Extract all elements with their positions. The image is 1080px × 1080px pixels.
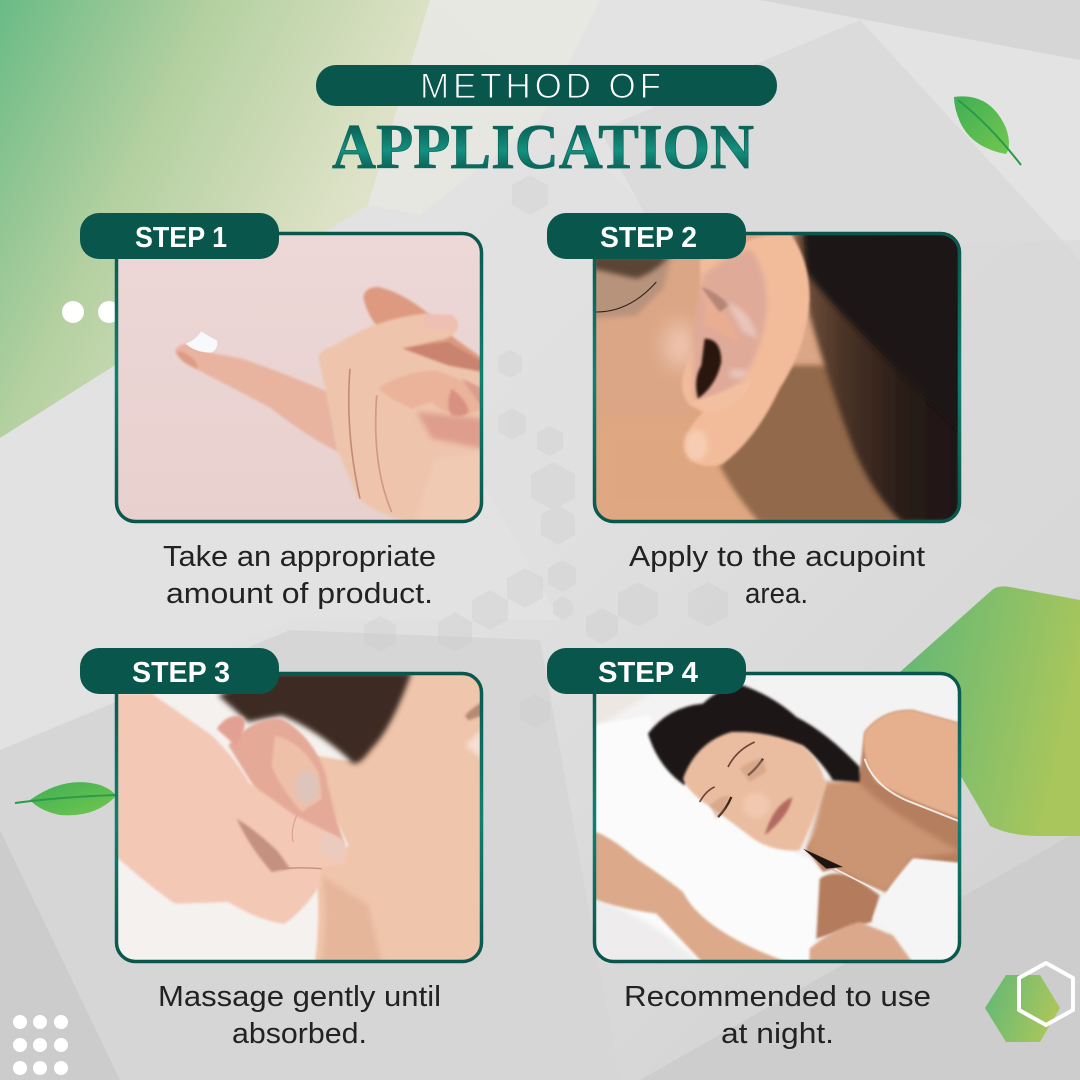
photo: finger with cream — [115, 232, 483, 523]
caption: step 4: Recommended to use — [624, 981, 931, 1013]
badge: step 2: STEP 2 — [600, 222, 697, 254]
badge: step 4: STEP 4 — [598, 657, 698, 689]
badge: step 2 — [547, 213, 746, 259]
badge: step 3: STEP 3 — [132, 657, 230, 689]
panel: step 2 — [547, 213, 961, 610]
panel: step 3 — [80, 648, 483, 1050]
green hexagon right — [900, 586, 1080, 836]
photo: sleeping woman — [593, 672, 961, 963]
badge: step 1: STEP 1 — [135, 222, 227, 254]
photo frame — [116, 674, 482, 962]
title: application: APPLICATION — [332, 112, 754, 182]
caption: step 2: area. — [745, 578, 808, 610]
badge: step 1 — [80, 213, 279, 259]
caption: step 3 — [158, 981, 441, 1050]
caption: step 1: amount of product. — [166, 578, 433, 610]
photo: massaging ear — [115, 672, 483, 963]
caption: step 1: Take an appropriate — [163, 541, 436, 573]
icon: leaf left — [15, 782, 116, 815]
badge: step 4 — [547, 648, 746, 694]
caption: step 4 — [624, 981, 931, 1050]
caption: step 3: Massage gently until — [158, 981, 441, 1013]
panel: step 1 — [80, 213, 483, 610]
decorative dots: upper left — [62, 301, 120, 323]
hexagon pattern — [364, 175, 728, 728]
photo frame — [116, 234, 482, 522]
decorative dots: lower left — [13, 1015, 68, 1075]
icon: leaf top right — [954, 96, 1021, 165]
panel: step 4 — [547, 648, 961, 1050]
title banner: method of: METHOD OF — [420, 67, 661, 106]
caption: step 1 — [163, 541, 436, 610]
photo frame — [594, 674, 960, 962]
caption: step 4: at night. — [721, 1018, 834, 1050]
badge: step 3 — [80, 648, 279, 694]
caption: step 2 — [629, 541, 925, 610]
caption: step 2: Apply to the acupoint — [629, 541, 925, 573]
photo frame — [594, 234, 960, 522]
caption: step 3: absorbed. — [232, 1018, 367, 1050]
photo: ear — [593, 232, 961, 523]
title banner: method of — [316, 65, 777, 106]
icon: hexagon badge — [985, 963, 1073, 1042]
